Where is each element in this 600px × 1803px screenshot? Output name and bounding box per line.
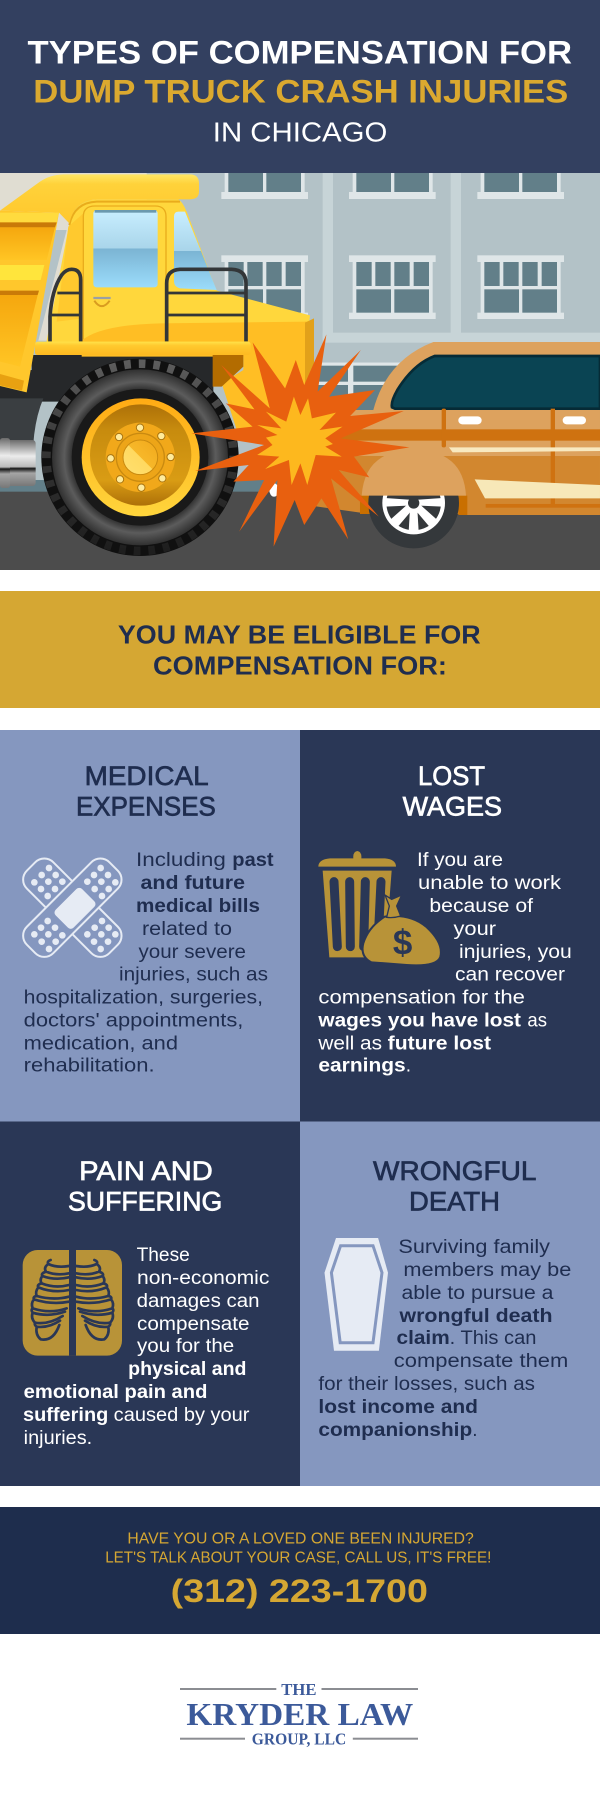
cab xyxy=(47,199,314,440)
call to action text: HAVE YOU OR A LOVED ONE BEEN INJURED? xyxy=(127,1530,474,1547)
text: pain and suffering: non-economic xyxy=(137,1268,269,1289)
dump bed xyxy=(0,211,59,392)
icon: rib cage xyxy=(23,1250,122,1356)
heading: medical expenses xyxy=(76,761,216,822)
heading: lost wages: LOST xyxy=(418,761,485,791)
text: wrongful death: wrongful death xyxy=(398,1306,553,1327)
text: medical expenses: rehabilitation. xyxy=(24,1056,155,1076)
heading: lost wages: WAGES xyxy=(403,792,502,822)
crash illustration: dump truck hitting a car xyxy=(0,173,600,570)
text: pain and suffering: suffering xyxy=(23,1405,108,1426)
title: IN CHICAGO xyxy=(213,117,387,148)
canopy xyxy=(0,174,199,223)
heading: pain and suffering: SUFFERING xyxy=(68,1187,222,1217)
text: pain and suffering: caused by your xyxy=(114,1405,250,1426)
title: DUMP TRUCK CRASH INJURIES xyxy=(33,74,568,110)
text: lost wages: because of xyxy=(429,896,534,917)
logo: The Kryder Law Group, LLC: KRYDER LAW xyxy=(186,1696,413,1732)
text: pain and suffering: you for the xyxy=(137,1336,234,1357)
logo: The Kryder Law Group, LLC xyxy=(180,1680,418,1748)
banner heading: COMPENSATION FOR: xyxy=(153,650,447,680)
text: pain and suffering xyxy=(23,1245,269,1449)
text: medical expenses: related to xyxy=(142,919,232,940)
text: wrongful death: members may be xyxy=(403,1260,571,1281)
text: pain and suffering: physical and xyxy=(128,1359,246,1380)
text: pain and suffering: compensate xyxy=(137,1314,250,1335)
logo: The Kryder Law Group, LLC: GROUP, LLC xyxy=(252,1729,346,1748)
text: pain and suffering: injuries. xyxy=(24,1428,92,1449)
heading: pain and suffering xyxy=(68,1156,222,1217)
text: wrongful death: lost income and xyxy=(318,1397,478,1418)
call to action text xyxy=(105,1530,491,1566)
banner heading: YOU MAY BE ELIGIBLE FOR xyxy=(118,620,481,650)
text: wrongful death: companionship xyxy=(318,1420,472,1441)
text: wrongful death: claim xyxy=(396,1328,450,1349)
text: medical expenses xyxy=(24,850,274,1076)
deck xyxy=(35,342,251,355)
car wheel xyxy=(368,458,459,548)
text: medical expenses: your severe xyxy=(138,942,246,963)
icon: trash can and money bag xyxy=(318,851,440,964)
text: wrongful death xyxy=(318,1237,571,1441)
heading: wrongful death xyxy=(373,1156,536,1217)
text: lost wages: well as xyxy=(317,1034,382,1054)
banner heading xyxy=(118,620,481,680)
text: wrongful death: compensate them xyxy=(394,1351,568,1372)
text: lost wages xyxy=(317,850,572,1076)
heading: lost wages xyxy=(403,761,502,822)
icon: crossed bandages xyxy=(18,853,127,962)
panel: pain and suffering xyxy=(0,1122,300,1486)
heading: wrongful death: DEATH xyxy=(409,1187,500,1217)
text: lost wages: wages you have lost xyxy=(317,1010,522,1032)
text: pain and suffering: damages can xyxy=(137,1291,260,1312)
dump truck xyxy=(0,174,314,556)
panel: wrongful death xyxy=(300,1122,600,1486)
call to action footer xyxy=(0,1507,600,1634)
text: medical expenses: injuries, such as xyxy=(119,964,268,986)
text: pain and suffering: emotional pain and xyxy=(24,1382,207,1403)
text: lost wages: unable to work xyxy=(418,873,562,894)
text: lost wages: earnings xyxy=(318,1056,406,1076)
text: lost wages: your xyxy=(454,919,497,940)
text: medical expenses: hospitalization, surgeries, xyxy=(24,988,263,1008)
text: medical expenses: medical bills xyxy=(136,896,260,917)
railings xyxy=(50,269,246,341)
text: lost wages: can recover xyxy=(455,964,566,986)
text: lost wages: as xyxy=(527,1010,547,1032)
heading: pain and suffering: PAIN AND xyxy=(79,1156,213,1186)
eligibility banner xyxy=(0,591,600,708)
text: lost wages: compensation for the xyxy=(318,988,525,1008)
car headlight xyxy=(269,483,279,497)
text: medical expenses: medication, and xyxy=(24,1034,178,1054)
text: wrongful death: . xyxy=(472,1420,477,1441)
truck wheel xyxy=(41,359,239,556)
text: lost wages: future lost xyxy=(388,1034,492,1054)
car xyxy=(313,342,600,548)
road xyxy=(0,492,600,570)
text: pain and suffering: These xyxy=(137,1245,190,1266)
text: medical expenses: past xyxy=(232,850,274,871)
explosion xyxy=(191,334,409,547)
title xyxy=(28,34,572,148)
call to action text: LET'S TALK ABOUT YOUR CASE, CALL US, IT'S FREE! xyxy=(105,1549,491,1566)
text: medical expenses: doctors' appointments, xyxy=(24,1010,243,1032)
text: wrongful death: able to pursue a xyxy=(402,1283,554,1304)
heading: medical expenses: MEDICAL xyxy=(85,761,209,791)
panel: lost wages xyxy=(300,730,600,1122)
heading: wrongful death: WRONGFUL xyxy=(373,1156,536,1186)
text: wrongful death: Surviving family xyxy=(398,1237,551,1258)
exhaust xyxy=(0,438,36,488)
title: TYPES OF COMPENSATION FOR xyxy=(28,34,572,70)
icon: trash can and money bag: $ xyxy=(393,923,412,962)
text: medical expenses: and future xyxy=(140,873,245,894)
text: medical expenses: Including xyxy=(136,850,226,871)
icon: coffin xyxy=(324,1238,388,1351)
panel: medical expenses xyxy=(0,730,300,1122)
phone number: (312) 223-1700 xyxy=(171,1573,428,1609)
building background xyxy=(0,173,600,493)
header banner xyxy=(0,0,600,173)
logo: The Kryder Law Group, LLC: THE xyxy=(281,1680,316,1699)
text: lost wages: injuries, you xyxy=(459,942,572,963)
heading: medical expenses: EXPENSES xyxy=(76,792,216,822)
text: wrongful death: for their losses, such as xyxy=(318,1374,535,1395)
text: lost wages: If you are xyxy=(417,850,503,871)
text: lost wages: . xyxy=(406,1056,411,1076)
text: wrongful death: . This can xyxy=(450,1328,536,1349)
